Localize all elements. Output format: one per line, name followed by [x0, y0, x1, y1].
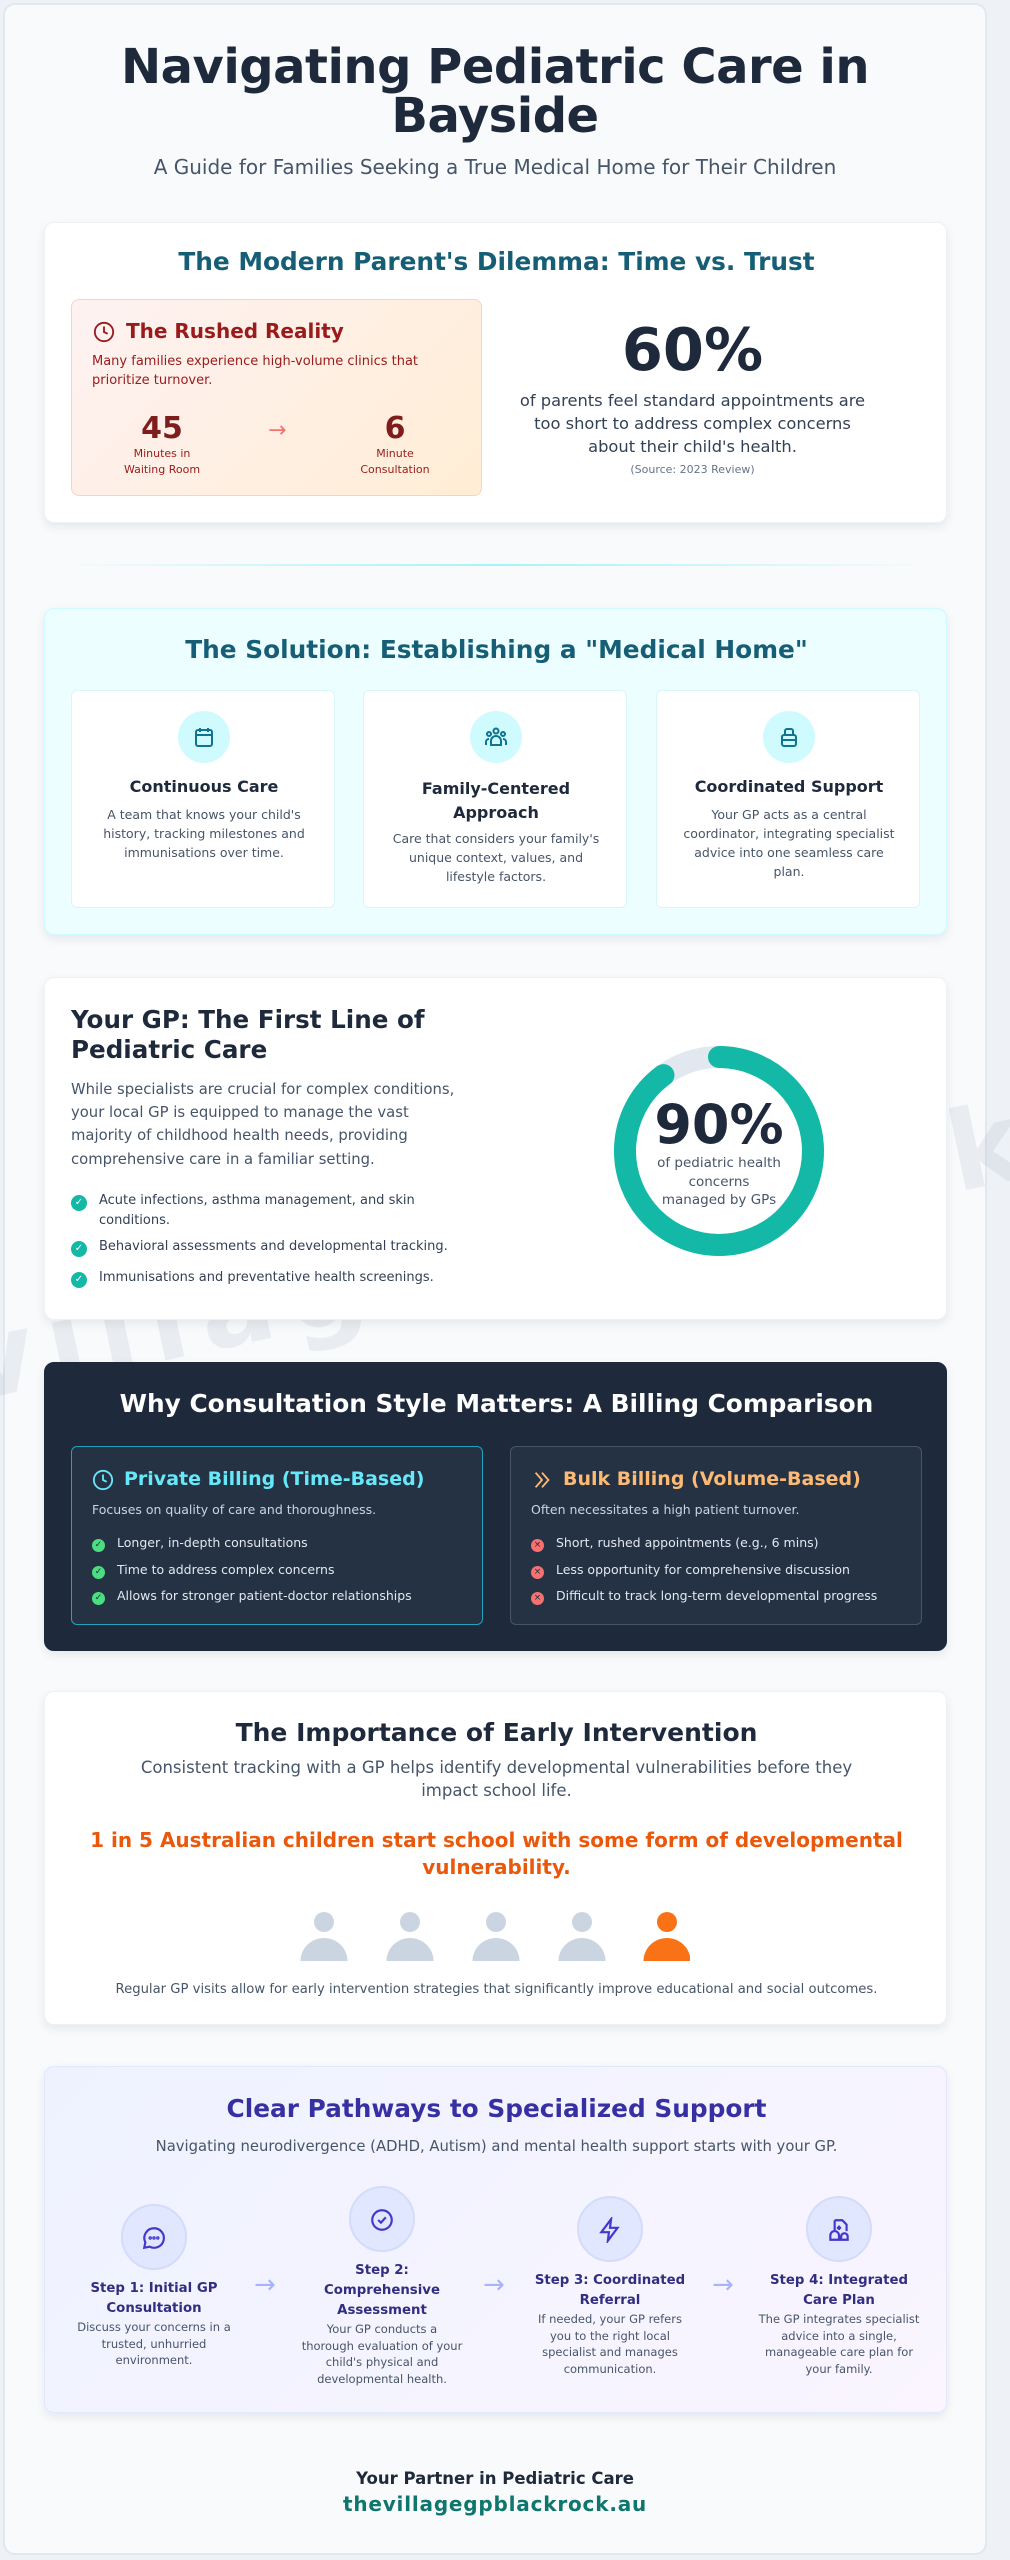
heading: solution: The Solution: Establishing a "Medical Home": [185, 635, 808, 664]
panel: early intervention: [44, 1691, 947, 2025]
step 1: Step 1: Initial GP: [90, 2281, 218, 2296]
icon: family: [470, 711, 522, 763]
arrow 3: →: [712, 2270, 734, 2300]
footer: [343, 2469, 647, 2516]
chart: donut 90%: managed by GPs: [662, 1192, 776, 1208]
panel: private billing: ✓: [95, 1593, 102, 1603]
card: coordinated support: Coordinated Support: [695, 777, 883, 796]
icon: care plan: [806, 2196, 872, 2262]
chart: donut 90%: [614, 1046, 824, 1256]
heading: early intervention: The Importance of Early Intervention: [236, 1718, 757, 1747]
card: continuous care: A team that knows your child's history, tracking milestones and immunisations over time.: [103, 807, 305, 860]
panel: rushed reality: [71, 299, 482, 496]
step 4: Step 4: Integrated: [770, 2273, 908, 2288]
stat: 45 minutes: 45: [141, 411, 183, 446]
subtitle: A Guide for Families Seeking a True Medical Home for Their Children: [154, 155, 836, 179]
arrow: →: [268, 418, 286, 443]
panel: bulk billing: Less opportunity for comprehensive discussion: [556, 1562, 850, 1576]
panel: private billing: ✓: [95, 1566, 102, 1576]
stat: 6 minute: Minute: [376, 447, 414, 460]
heading: first line: Your GP: The First Line of Pediatric Care: [71, 1005, 425, 1064]
panel: bulk billing: Bulk Billing (Volume-Based): [563, 1468, 861, 1490]
panel: bulk billing: [510, 1446, 922, 1625]
panel: private billing: Time to address complex concerns: [117, 1562, 334, 1576]
heading: dilemma: The Modern Parent's Dilemma: Time vs. Trust: [178, 247, 815, 276]
step 2: Assessment: [337, 2303, 427, 2318]
stat: 45 minutes: Waiting Room: [124, 463, 200, 476]
panel: pathways: [44, 2066, 947, 2413]
chart: donut 90%: 90%: [654, 1093, 784, 1156]
stat: 60%: [520, 315, 865, 476]
stat: 6 minute: [360, 411, 430, 476]
stat: 6 minute: Consultation: [360, 463, 430, 476]
heading: rushed reality: The Rushed Reality: [126, 319, 344, 343]
panel: bulk billing: Difficult to track long-term developmental progress: [556, 1588, 877, 1603]
panel: private billing: Allows for stronger patient-doctor relationships: [117, 1588, 412, 1603]
step 2: Step 2:: [355, 2263, 409, 2278]
stat: 1 in 5: 1 in 5 Australian children start school with some form of developmental vulnerability.: [90, 1828, 903, 1879]
icon: chevrons: [535, 1472, 550, 1488]
step 3: Step 3: Coordinated: [535, 2273, 685, 2288]
checklist: ✓: [75, 1243, 83, 1254]
stat: 60%: (Source: 2023 Review): [630, 463, 755, 476]
card: family-centered: [363, 690, 627, 908]
card: continuous care: [71, 690, 335, 908]
arrow 2: →: [483, 2270, 505, 2300]
step 1: [77, 2204, 231, 2367]
step 4: The GP integrates specialist advice into a single, manageable care plan for your family.: [759, 2312, 919, 2376]
checklist: Immunisations and preventative health screenings.: [99, 1270, 434, 1285]
panel: your GP: [44, 977, 947, 1320]
step 4: [758, 2196, 920, 2376]
checklist: Behavioral assessments and developmental tracking.: [99, 1239, 448, 1254]
text: GP paragraph: While specialists are crucial for complex conditions, your local GP is equipped to manage the vast majority of childhood health needs, providing comprehensive care in a familiar setting.: [71, 1081, 454, 1168]
icon: bolt: [577, 2196, 643, 2262]
chart: donut 90%: concerns: [689, 1174, 749, 1190]
panel: bulk billing: Often necessitates a high patient turnover.: [531, 1502, 800, 1517]
step 3: [535, 2196, 685, 2376]
icon: clock: [92, 1470, 114, 1490]
icon: clock: [94, 322, 114, 342]
panel: bulk billing: ×: [534, 1540, 541, 1550]
panel: billing comparison: [44, 1362, 947, 1651]
panel: dilemma: [44, 222, 947, 523]
checklist: [71, 1193, 448, 1288]
title: Navigating Pediatric Care in Bayside: [121, 39, 869, 144]
card: coordinated support: Your GP acts as a central coordinator, integrating specialist advice into one seamless care plan.: [683, 807, 895, 879]
card: family-centered: Approach: [453, 803, 539, 822]
card: coordinated support: [656, 690, 920, 908]
card: family-centered: Care that considers your family's unique context, values, and lifestyle factors.: [393, 831, 599, 884]
heading: pathways: Clear Pathways to Specialized Support: [227, 2094, 766, 2123]
chart: donut 90%: of pediatric health: [657, 1155, 781, 1171]
checklist: Acute infections, asthma management, and skin conditions.: [99, 1193, 415, 1228]
step 2: Comprehensive: [324, 2283, 440, 2298]
stat: 45 minutes: Minutes in: [134, 447, 190, 460]
text: rushed desc: Many families experience high-volume clinics that prioritize turnover.: [92, 354, 418, 388]
text: pathways desc: Navigating neurodivergence (ADHD, Autism) and mental health support starts with your GP.: [156, 2138, 837, 2155]
text: tracking desc: Consistent tracking with a GP helps identify developmental vulnerabilities before they impact school life.: [141, 1758, 852, 1800]
footer: thevillagegpblackrock.au: [343, 2492, 647, 2516]
panel: private billing: [71, 1446, 483, 1625]
text: footnote: Regular GP visits allow for early intervention strategies that significantly improve educational and social outcomes.: [116, 1982, 877, 1997]
icon: check circle: [349, 2186, 415, 2252]
icon: briefcase: [763, 711, 815, 763]
footer: Your Partner in Pediatric Care: [356, 2469, 634, 2488]
panel: bulk billing: Short, rushed appointments (e.g., 6 mins): [556, 1535, 819, 1550]
panel: private billing: ✓: [95, 1540, 102, 1550]
step 2: Your GP conducts a thorough evaluation of your child's physical and developmental health.: [302, 2322, 462, 2386]
icon: calendar: [178, 711, 230, 763]
panel: bulk billing: ×: [534, 1566, 541, 1576]
step 3: Referral: [580, 2293, 640, 2308]
step 1: Discuss your concerns in a trusted, unhurried environment.: [77, 2320, 231, 2367]
card: continuous care: Continuous Care: [130, 777, 278, 796]
card: family-centered: Family-Centered: [422, 779, 570, 798]
icon: chat: [121, 2204, 187, 2270]
step 2: [302, 2186, 462, 2386]
stat: 6 minute: 6: [385, 411, 405, 446]
step 1: Consultation: [106, 2301, 202, 2316]
step 4: Care Plan: [803, 2293, 875, 2308]
stat: 60%: 60%: [622, 315, 763, 384]
stat: 45 minutes: [124, 411, 200, 476]
chart: people icons: [300, 1912, 690, 1961]
panel: bulk billing: ×: [534, 1593, 541, 1603]
panel: private billing: Focuses on quality of care and thoroughness.: [92, 1502, 376, 1517]
stat: 60%: of parents feel standard appointments are too short to address complex concerns about their child's health.: [520, 391, 865, 456]
arrow 1: →: [254, 2270, 276, 2300]
panel: private billing: Longer, in-depth consultations: [117, 1535, 308, 1550]
step 3: If needed, your GP refers you to the right local specialist and manages communication.: [538, 2312, 682, 2376]
checklist: ✓: [75, 1274, 83, 1285]
checklist: ✓: [75, 1197, 83, 1208]
panel: private billing: Private Billing (Time-Based): [124, 1468, 424, 1490]
panel: solution: [44, 608, 947, 935]
heading: billing: Why Consultation Style Matters: A Billing Comparison: [120, 1389, 873, 1418]
